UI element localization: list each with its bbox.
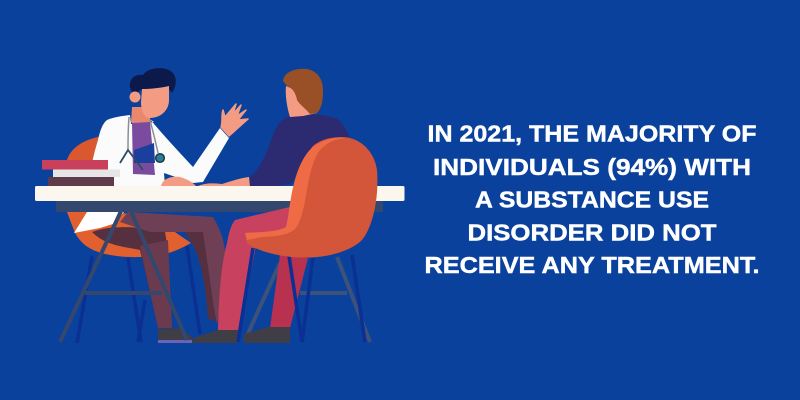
table top [35,186,404,201]
table underside [56,201,383,212]
doctor's hair [130,68,176,96]
stack of books [42,160,120,186]
doctor's chair [67,137,191,257]
statement text: IN 2021, THE MAJORITY OF [428,120,756,146]
stethoscope [120,117,164,170]
statement text: INDIVIDUALS (94%) WITH [433,154,751,180]
doctor's trousers [92,212,225,343]
statement text [424,120,760,278]
doctor's head [130,86,169,130]
patient's torso [250,114,350,189]
patient's chair [245,137,377,258]
patient's head [286,86,317,117]
statement text: DISORDER DID NOT [468,220,717,246]
doctor's coat tail [74,212,124,233]
patient's chair legs [238,248,365,342]
patient's table legs [245,257,370,342]
doctor's shirt [132,122,155,175]
patient's hair [283,69,323,114]
hands on table [161,177,250,190]
doctor's white coat [91,115,229,186]
statement text: RECEIVE ANY TREATMENT. [424,252,760,278]
patient's trousers [192,207,308,343]
doctor's chair legs [77,246,200,343]
doctor's raised hand [221,104,248,136]
doctor's table legs [60,209,187,342]
statement text: A SUBSTANCE USE [475,186,709,212]
illustration: doctor and patient at a table [35,68,404,343]
